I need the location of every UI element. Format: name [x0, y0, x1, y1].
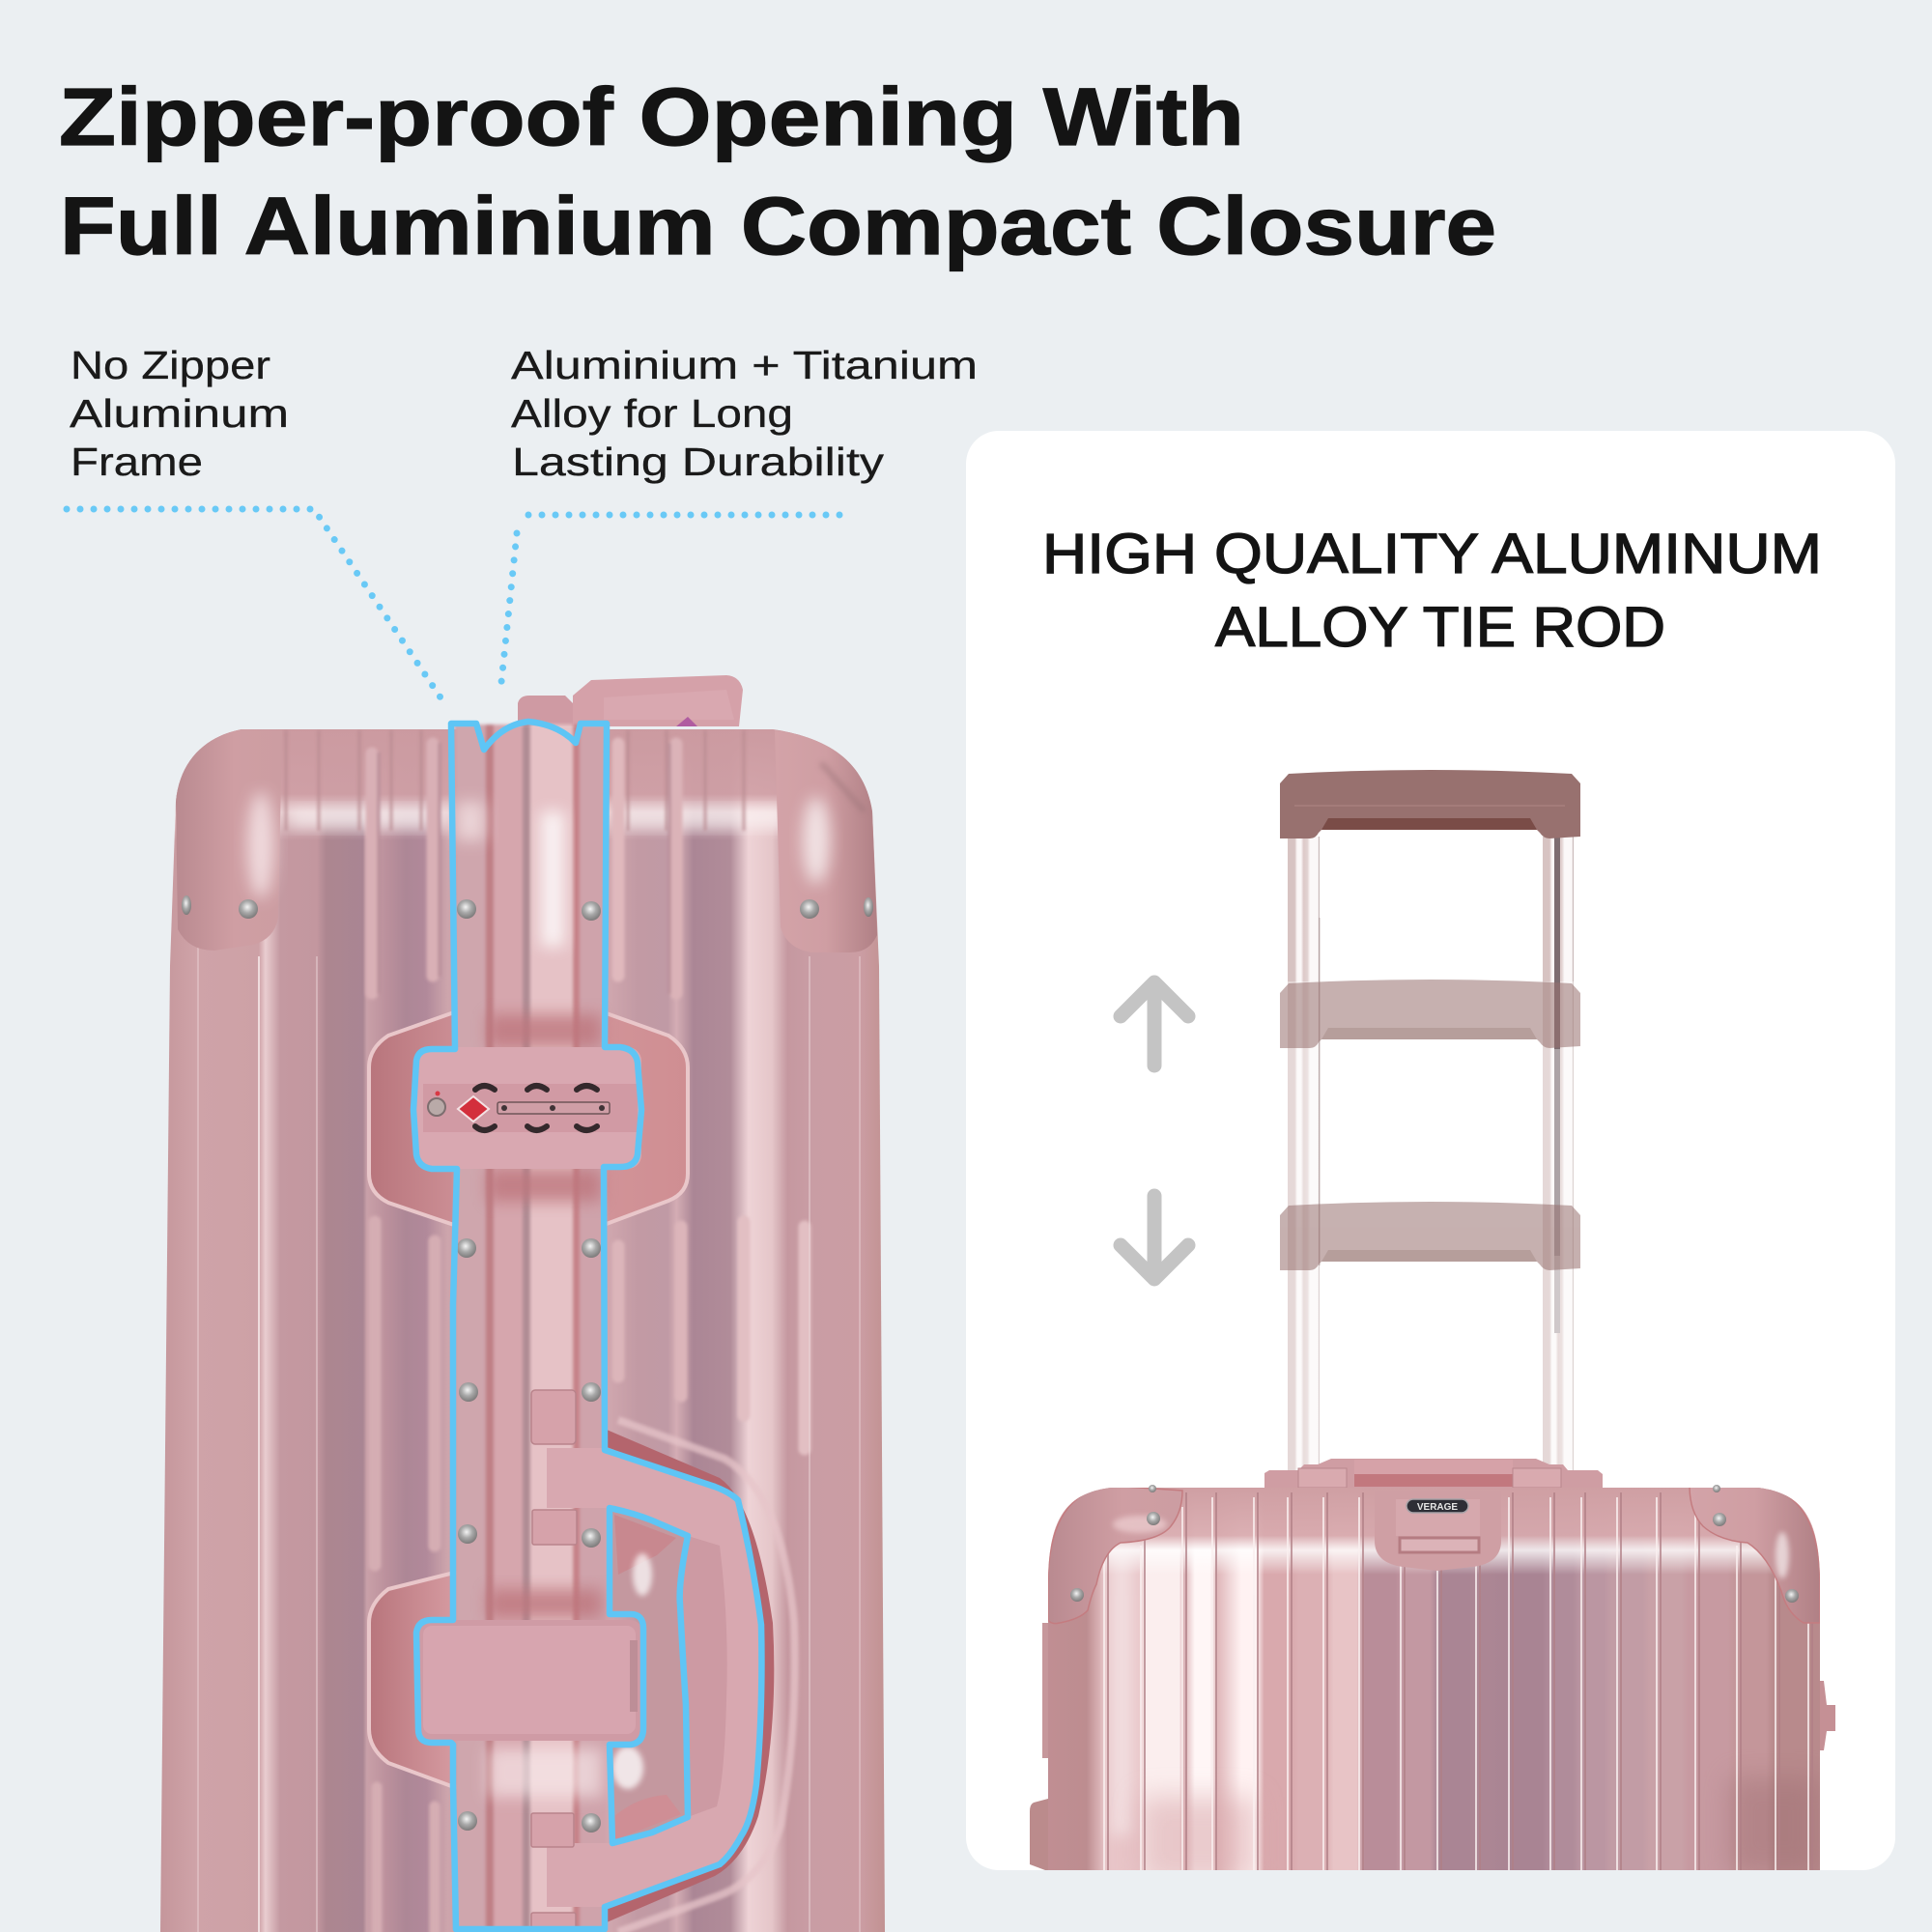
right suitcase [1030, 1459, 1835, 1884]
text block: no zipper aluminum frame [70, 343, 289, 484]
ghost handle: lowest position [1280, 1202, 1580, 1270]
dotted leader: no zipper frame [67, 509, 440, 697]
screws [182, 895, 873, 1833]
handle inner panel [680, 1536, 727, 1817]
corner plate: right [775, 730, 877, 952]
hinge blocks [531, 1390, 577, 1932]
wheel housing [1030, 1799, 1053, 1870]
handle inner window [610, 1508, 688, 1843]
frame band [454, 724, 607, 1932]
handle recess [369, 1573, 580, 1787]
side strip left [1042, 1623, 1050, 1758]
side handle [547, 1448, 761, 1907]
corner screws [1070, 1485, 1799, 1603]
lock recess [369, 1012, 688, 1225]
corner plate: top right [1690, 1486, 1820, 1623]
brand badge [1406, 1499, 1468, 1513]
text block: no zipper aluminum frame: No Zipper [71, 343, 270, 387]
blue frame outline [413, 722, 761, 1929]
icon: down arrow [1121, 1196, 1188, 1279]
front latch [1375, 1491, 1501, 1571]
corner plate: top left [1048, 1486, 1182, 1624]
side handle outer ridge [618, 1420, 795, 1932]
left suitcase close-up [155, 675, 889, 1932]
text block: aluminium titanium alloy: Aluminium + Titanium [511, 343, 978, 387]
text block: aluminium titanium alloy [511, 343, 978, 484]
text block: no zipper aluminum frame: Aluminum [70, 391, 289, 436]
corner plate: left [176, 729, 282, 951]
handle end cap [418, 1620, 643, 1741]
suitcase top handle [518, 675, 743, 726]
panel heading: ALLOY TIE ROD [1215, 596, 1665, 659]
suitcase body [155, 715, 889, 1932]
title [59, 71, 1496, 271]
ghost handle: middle position [1280, 980, 1580, 1048]
text block: aluminium titanium alloy: Alloy for Long [511, 391, 793, 436]
panel heading: HIGH QUALITY ALUMINUM [1042, 523, 1822, 585]
title: Full Aluminium Compact Closure [60, 181, 1496, 271]
side knob right [1818, 1681, 1835, 1750]
icon: up arrow [1121, 982, 1188, 1065]
combination lock [416, 1047, 641, 1169]
text block: no zipper aluminum frame: Frame [71, 440, 203, 484]
panel heading [1042, 523, 1822, 659]
title: Zipper-proof Opening With [59, 71, 1244, 162]
top carry handle [1264, 1459, 1603, 1488]
side handle shadow [607, 1430, 774, 1922]
dotted leader: alloy [500, 515, 839, 692]
tie rod poles [1288, 837, 1574, 1474]
text block: aluminium titanium alloy: Lasting Durability [512, 440, 885, 484]
telescopic handle grip [1280, 770, 1580, 838]
body [1048, 1486, 1821, 1884]
panel: tie rod [966, 431, 1895, 1870]
brand badge: VERAGE [1417, 1502, 1458, 1513]
